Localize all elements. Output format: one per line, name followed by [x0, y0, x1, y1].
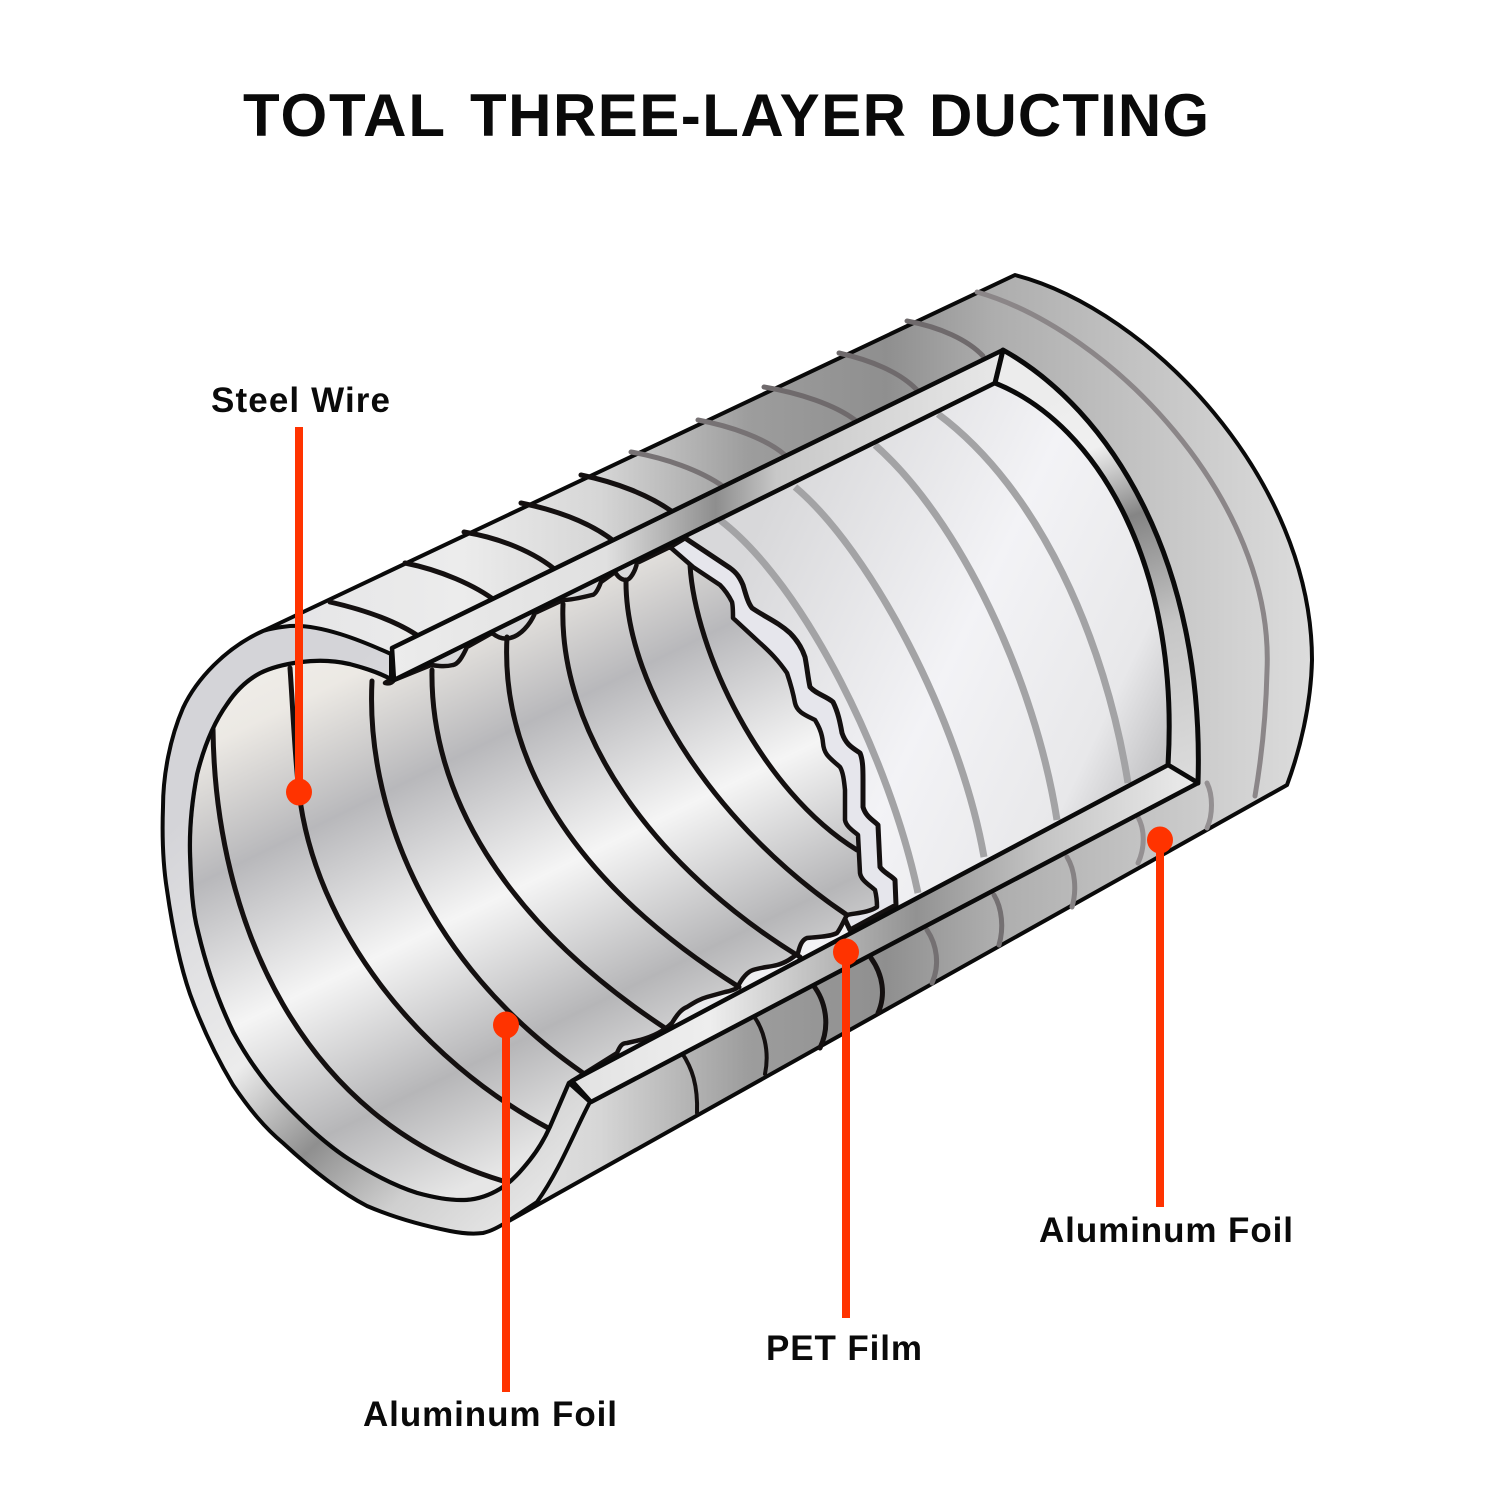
PET film layer with window	[397, 383, 1169, 1082]
duct cutaway illustration	[163, 275, 1312, 1234]
callout: PET film: PET Film	[766, 1329, 922, 1368]
right window rim	[995, 350, 1198, 783]
steel wire ribs	[213, 565, 857, 1181]
title: TOTAL	[243, 82, 445, 149]
callout: inner aluminum foil	[363, 1012, 617, 1434]
callout: steel wire	[211, 381, 390, 806]
wavy PET edge	[670, 538, 896, 930]
outer grooves bottom strip	[682, 783, 1212, 1113]
callout: steel wire: Steel Wire	[211, 381, 390, 420]
outer aluminum foil shell	[263, 275, 1312, 1222]
title: DUCTING	[929, 82, 1209, 149]
callout: PET film	[766, 938, 922, 1368]
title: THREE-LAYER	[470, 82, 906, 149]
front ring rim	[163, 626, 590, 1234]
callout: outer aluminum foil: Aluminum Foil	[1039, 1211, 1293, 1250]
inner aluminum foil surface	[190, 547, 877, 1200]
top edge bar	[392, 350, 1003, 680]
callout: inner aluminum foil: Aluminum Foil	[363, 1395, 617, 1434]
callout: outer aluminum foil	[1039, 826, 1293, 1250]
title	[243, 82, 1209, 149]
outer grooves top strip	[330, 292, 1267, 796]
bottom edge bar	[572, 765, 1198, 1102]
